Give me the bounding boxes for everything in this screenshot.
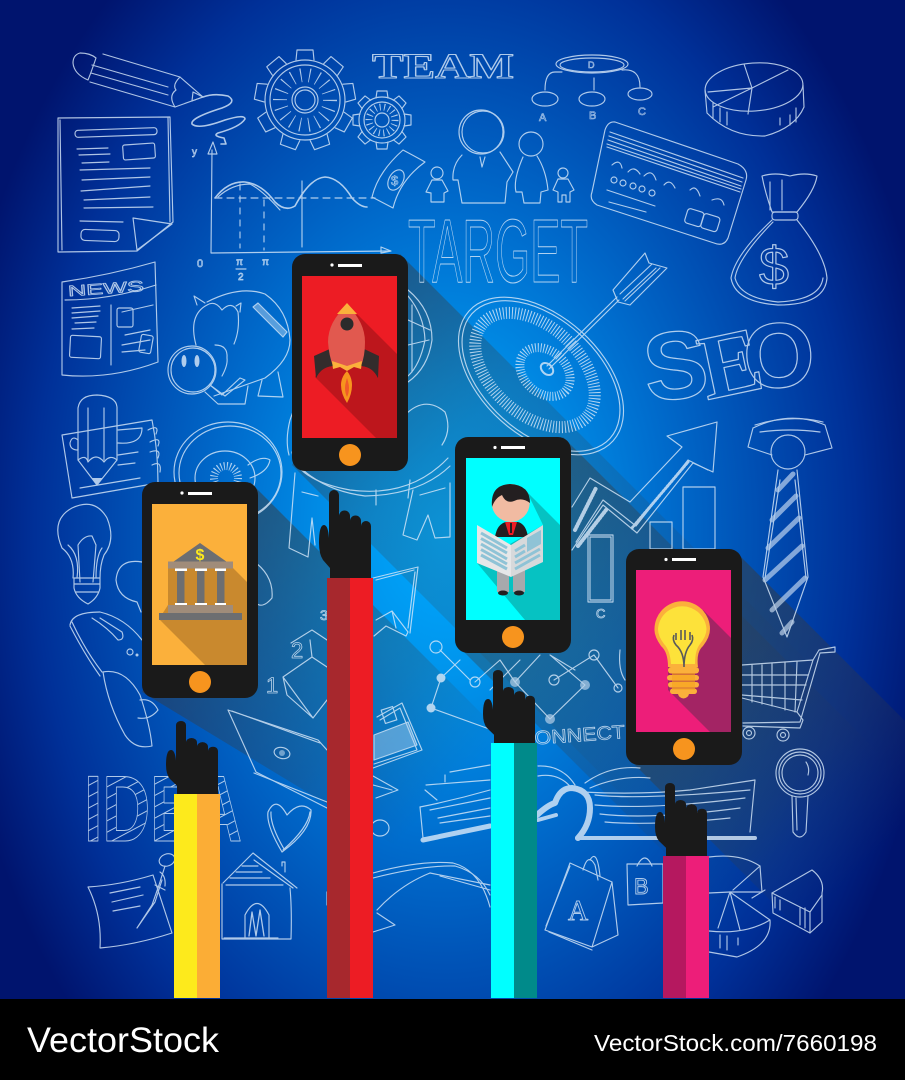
bank icon — [159, 543, 247, 665]
doodle: IDEA word: IDEA — [84, 756, 242, 861]
doodle: magnifier — [776, 749, 824, 837]
doodle: connect network — [426, 641, 626, 751]
doodle: divided pie chart — [709, 856, 770, 957]
doodle: pencil — [73, 53, 203, 107]
doodle: necktie — [748, 418, 832, 637]
doodle: document — [58, 117, 173, 252]
doodle: speech bubble — [116, 560, 272, 612]
watermark footer bar: VectorStock — [27, 1021, 220, 1060]
doodle: shopping bags — [545, 856, 663, 950]
doodle: coffee cup plate — [174, 422, 282, 522]
doodle: megaphone — [70, 612, 158, 747]
doodle: paper arc — [327, 862, 490, 932]
phone: rocket on red screen — [292, 254, 408, 471]
doodle: credit card — [591, 122, 747, 244]
doodle: money bag — [731, 174, 827, 305]
doodle: character behind phone — [287, 395, 450, 557]
doodle: big gear — [254, 50, 356, 150]
doodle: notebook and pencil — [62, 395, 160, 498]
doodle: org chart — [532, 55, 652, 124]
doodle: 3D pie chart — [703, 60, 805, 136]
doodle: piggy bank — [168, 291, 290, 404]
long shadows of phones — [142, 254, 905, 1000]
arm: red with hand — [319, 490, 373, 998]
doodle: squiggle — [192, 95, 245, 144]
doodle: banknote — [372, 150, 425, 208]
doodle: TEAM word: TEAM — [372, 46, 514, 86]
doodle: steps 1 2 3: 3 — [320, 607, 328, 623]
doodle: light bulb — [58, 504, 111, 604]
doodle: pie wedge — [772, 870, 823, 933]
doodle: small gear — [353, 91, 411, 149]
phone: businessman on cyan screen — [455, 437, 571, 653]
doodle: house — [222, 853, 297, 939]
doodle: floppy disk — [373, 703, 422, 768]
doodle: rising arrow chart: C — [596, 606, 605, 621]
sketched doodles — [58, 46, 835, 957]
doodle: TARGET word: TARGET — [408, 202, 588, 302]
doodle: connect network: CONNECT — [518, 722, 626, 751]
doodle: sine chart: y — [192, 147, 197, 158]
doodle: org chart: A — [539, 112, 547, 124]
doodle: rising arrow chart — [572, 422, 717, 621]
arm: yellow with hand — [166, 721, 220, 998]
businessman icon — [477, 484, 560, 620]
phone: bank on orange screen — [142, 482, 258, 698]
doodle: banknote: $ — [391, 173, 399, 188]
doodle: money bag: $ — [759, 237, 789, 297]
doodle: sine chart — [192, 142, 391, 283]
doodle: SEO word: E — [690, 307, 771, 420]
doodle: shopping bags: B — [634, 874, 649, 899]
doodle: books and number two — [420, 765, 755, 840]
doodle: heart — [268, 804, 311, 852]
doodle: laptop — [228, 710, 398, 836]
doodle: steps 1 2 3: 1 — [266, 673, 278, 698]
phone: light bulb on pink screen — [626, 549, 742, 765]
doodle: paper and box — [373, 567, 418, 636]
rocket icon — [314, 303, 397, 438]
doodle: SEO word: S — [638, 309, 713, 422]
doodle: sine chart: 0 — [197, 258, 203, 270]
doodle: org chart: B — [589, 110, 596, 122]
doodle: newspaper: NEWS — [67, 278, 144, 300]
doodle: globe behind red phone — [408, 290, 432, 382]
arm: cyan with hand — [483, 670, 537, 998]
doodle: sine chart: π — [262, 257, 269, 268]
watermark footer bar — [0, 999, 905, 1080]
doodle: shopping bags: A — [568, 896, 589, 927]
doodle: target and arrow — [429, 253, 667, 485]
doodle: org chart: D — [588, 60, 595, 70]
arm: pink with hand — [655, 783, 709, 998]
doodle: SEO word: O — [740, 303, 818, 409]
doodle: SEO word — [638, 303, 818, 422]
doodle: steps 1 2 3: 2 — [291, 638, 303, 663]
doodle: sine chart: π — [236, 257, 243, 268]
doodle: newspaper — [62, 262, 158, 376]
doodle: steps 1 2 3 — [266, 607, 328, 718]
doodle: paper and pin — [88, 852, 177, 948]
bank icon: $ — [196, 547, 205, 564]
doodle: sine chart: 2 — [238, 272, 244, 283]
doodle: team people — [426, 110, 574, 203]
doodle: shopping cart — [742, 647, 835, 741]
watermark footer bar: VectorStock.com/7660198 — [594, 1030, 877, 1056]
doodle: org chart: C — [638, 106, 646, 118]
light bulb icon — [654, 601, 731, 732]
